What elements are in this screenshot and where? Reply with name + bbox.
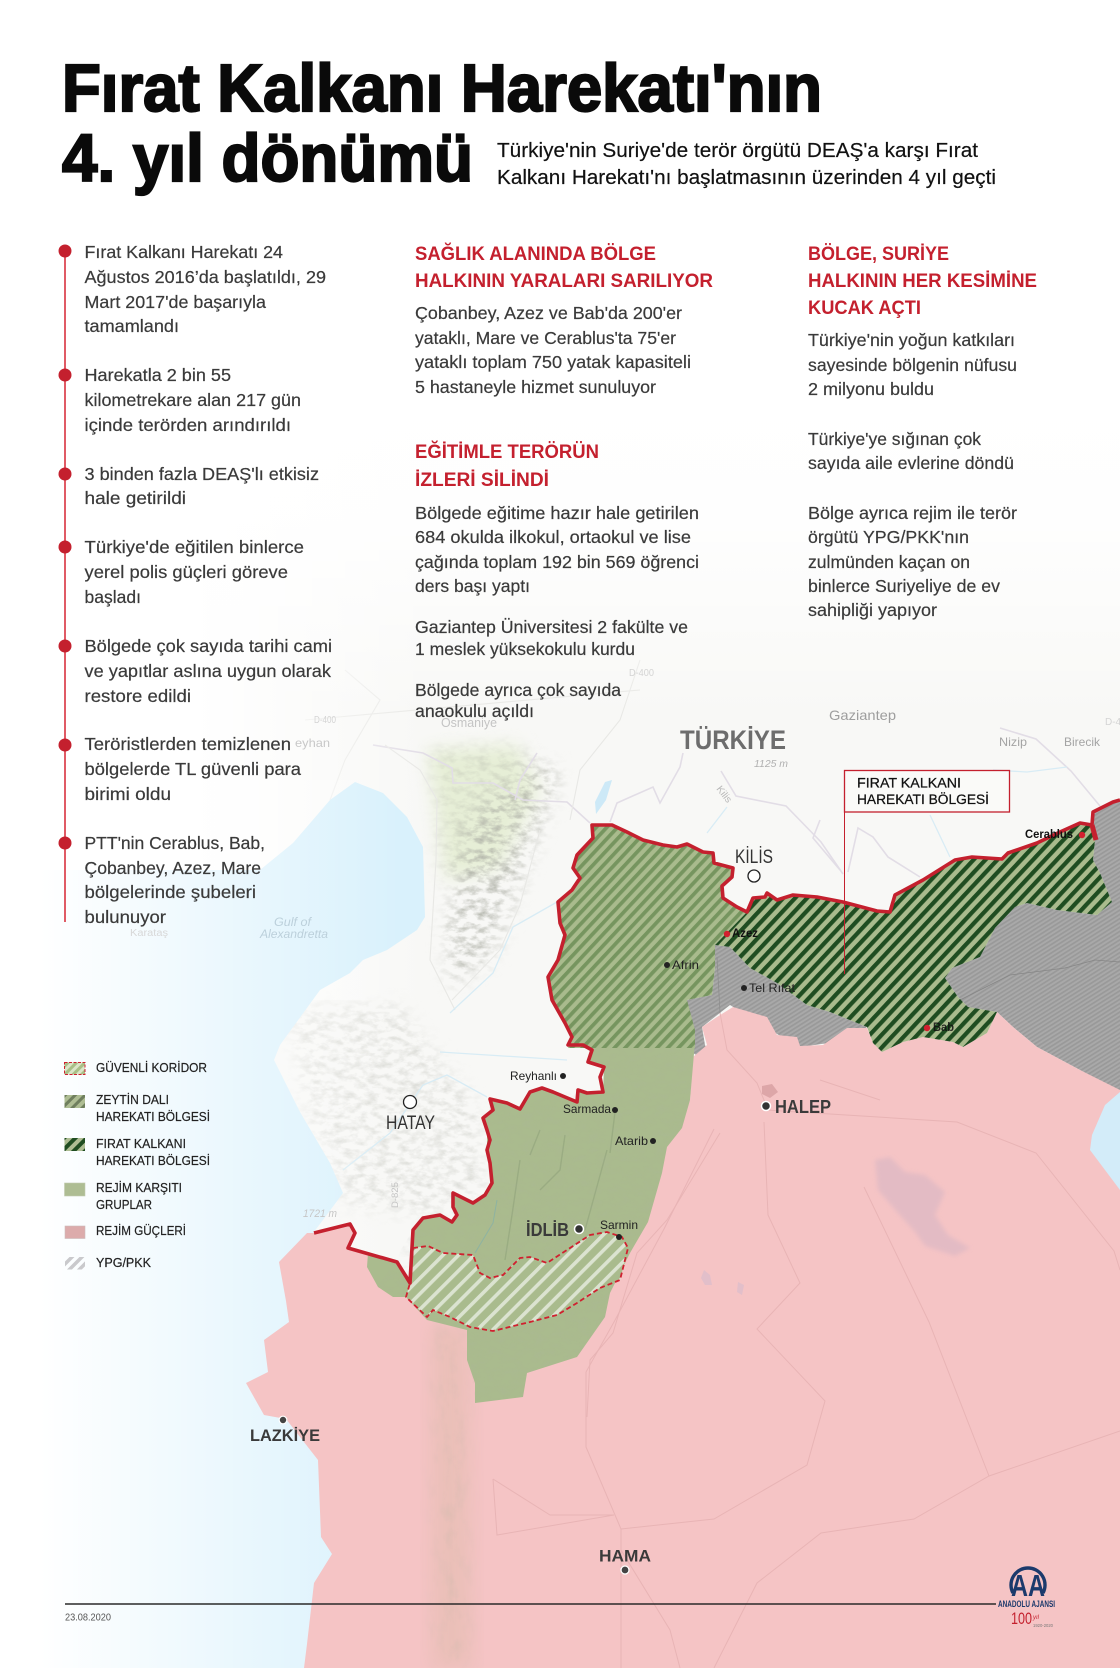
label: Sarmin [600,1218,638,1240]
faint base map labels: Osmaniye [441,715,497,730]
small salt lakes [701,1270,744,1295]
label: Atarib: Atarib [615,1134,648,1148]
border notch at Cerablus [1092,825,1096,840]
text: university: Gaziantep Üniversitesi 2 fakülte ve [415,617,688,637]
faint base map labels: Karataş [130,928,168,939]
text: population [808,330,1017,399]
Euphrates lake [1090,1092,1120,1190]
white fade upper sea [0,780,400,870]
province borders [373,728,1100,877]
faint base map labels: Kilis [714,784,734,805]
green highlands [427,745,540,880]
list item 4: başladı [84,587,141,607]
label: Hama [599,1546,651,1574]
text: education: Bölgede eğitime hazır hale getirilen [415,503,699,523]
panel: left timeline list [58,242,332,927]
logo name: ANADOLU AJANSI [998,1599,1055,1610]
text: refugees: Bölge ayrıca rejim ile terör [808,503,1017,523]
gulf label: Gulf of [274,917,313,929]
sea: Gulf of Alexandretta and Mediterranean [0,782,425,1668]
heading: education: İZLERİ SİLİNDİ [415,468,549,491]
lake [595,780,612,814]
label: Tel Rıfat: Tel Rıfat [749,981,796,995]
list item 5: ve yapıtlar aslına uygun olarak [84,661,331,681]
panel: right column [808,242,1037,620]
text: health: yataklı, Mare ve Cerablus'ta 75'er [415,328,676,348]
faint base map labels [130,668,1120,1220]
Idlib river [475,1200,497,1253]
callout leader line [844,770,846,974]
list item 1: Mart 2017'de başarıyla [84,292,266,312]
faint base map labels: Nizip [999,735,1027,749]
roads [305,660,640,1010]
white fade left [0,870,400,1668]
list item 5 [58,636,332,706]
label: Bab: Bab [933,1020,954,1034]
logo anniversary: 100 [1011,1609,1032,1628]
list item 3: hale getirildi [84,488,186,508]
faint base map labels: eyhan [295,736,330,750]
list item 2: içinde terörden arındırıldı [84,415,291,435]
faint base map labels: D-400 [314,715,336,726]
text: returning families: sayıda aile evlerine döndü [808,453,1014,473]
text: refugees: binlerce Suriyeliye de ev [808,576,1000,596]
legend: Fırat Kalkanı: FIRAT KALKANI [96,1136,186,1151]
label: Reyhanlı: Reyhanlı [510,1069,557,1083]
logo letters: AA [1011,1568,1045,1603]
heading: people [808,242,1037,319]
text: health [415,303,691,397]
heading: health [415,242,713,292]
heading: people: KUCAK AÇTI [808,297,921,319]
callout: Fırat Kalkanı Harekatı Bölgesi [844,770,1010,974]
text: education [415,503,699,596]
list item 4: Türkiye'de eğitilen binlerce [84,537,304,557]
list item 6 [58,734,301,804]
label: İdlib: İDLİB [526,1220,569,1240]
faint base map labels: Gaziantep [829,707,896,723]
logo: Anadolu Ajansı: 1920-2020 [1033,1623,1053,1628]
list item 4 [58,537,304,607]
legend: safe corridor: GÜVENLİ KORİDOR [96,1060,207,1075]
date: 23.08.2020 [65,1612,111,1624]
north-west land fade [0,380,430,1000]
YPG/PKK west area [685,945,867,1065]
heading: education [415,440,599,491]
faint base map labels: Alexandretta [259,929,328,941]
label: Sarmada: Sarmada [563,1102,611,1116]
label: Lazkiye: LAZKİYE [250,1426,320,1445]
label: Sarmin: Sarmin [600,1218,638,1232]
text: returning families [808,429,1014,473]
Hatay terrain texture [292,1004,487,1214]
rivers [343,767,1067,1170]
map labels: cities [250,725,1085,1574]
panel: base map [116,660,1120,1668]
valley terrain [430,1326,473,1666]
list item 7: Çobanbey, Azez, Mare [84,858,261,878]
text: kindergarten: anaokulu açıldı [415,701,534,721]
panel: regime forces area [246,1007,1120,1668]
list item 1: tamamlandı [84,316,179,336]
legend: Zeytin Dalı [64,1092,210,1124]
callout: Fırat Kalkanı Harekatı Bölgesi: HAREKATI BÖLGESİ [857,792,989,807]
regime area fill [246,1007,1120,1668]
label: Kilis: KİLİS [735,847,773,868]
text: education: çağında toplam 192 bin 569 öğrenci [415,552,699,572]
list item 1 [58,242,326,336]
mountain terrain texture [440,758,566,988]
list item 2: kilometrekare alan 217 gün [84,390,301,410]
logo arc [1011,1568,1045,1593]
text: health: Çobanbey, Azez ve Bab'da 200'er [415,303,682,323]
list item 6: bölgelerde TL güvenli para [84,759,301,779]
legend: Fırat Kalkanı: HAREKATI BÖLGESİ [96,1153,210,1168]
regime area roads [493,1013,1120,1668]
heading: people: BÖLGE, SURİYE [808,242,949,265]
list item 6: Teröristlerden temizlenen [84,734,291,754]
highland terrain texture [437,748,520,871]
logo: Anadolu Ajansı: yıl [1032,1615,1040,1621]
list item 7 [58,833,265,927]
title: Fırat Kalkanı Harekatı'nın [62,51,822,126]
text: university [415,617,688,659]
legend: YPG/PKK [65,1255,151,1270]
text: education: ders başı yaptı [415,576,530,596]
label: Kilis [735,847,773,882]
subtitle: Kalkanı Harekatı'nı başlatmasının üzerinden 4 yıl geçti [497,166,996,189]
list item 2 [58,365,301,435]
panel: legend [64,1060,210,1270]
Idlib terrain lines [505,1112,615,1260]
text: refugees: zulmünden kaçan on [808,552,970,572]
faint base map labels: 1125 m [754,758,788,770]
lake Jabbul [875,1157,970,1256]
subtitle [497,139,996,189]
legend: regime [65,1223,186,1238]
callout text: FIRAT KALKANI [857,776,961,790]
logo: Anadolu Ajansı [998,1568,1055,1628]
panel: middle column [415,242,713,721]
list item 5: Bölgede çok sayıda tarihi cami [84,636,332,656]
panel: opposition groups area [360,1040,700,1410]
list item 1: Fırat Kalkanı Harekatı 24 [84,242,283,262]
legend: opposition: GRUPLAR [96,1197,152,1212]
title [62,51,822,196]
list item 7: PTT'nin Cerablus, Bab, [84,833,265,853]
land area [0,380,1120,1668]
label: Lazkiye [250,1416,320,1445]
legend: regime: REJİM GÜÇLERİ [96,1223,186,1238]
heading: education: EĞİTİMLE TERÖRÜN [415,440,599,463]
panel: safe corridor [406,1232,628,1331]
subtitle: Türkiye'nin Suriye'de terör örgütü DEAŞ'a karşı Fırat [497,139,978,162]
legend: YPG/PKK: YPG/PKK [96,1255,151,1270]
text: returning families: Türkiye'ye sığınan çok [808,429,981,449]
list item 1: Ağustos 2016’da başlatıldı, 29 [84,267,326,287]
text: health: yataklı toplam 750 yatak kapasiteli [415,352,691,372]
faint base map labels: 1721 m [303,1208,337,1220]
list item 2: Harekatla 2 bin 55 [84,365,231,385]
label: Hatay: HATAY [386,1113,435,1134]
panel: Zeytin Dalı operation zone [548,825,747,1048]
text: kindergarten: Bölgede ayrıca çok sayıda [415,680,621,700]
label: Halep: HALEP [775,1097,831,1117]
callout box [844,770,1010,812]
list item 3: 3 binden fazla DEAŞ'lı etkisiz [84,464,319,484]
heading: health: HALKININ YARALARI SARILIYOR [415,270,713,292]
list item 7: bulunuyor [84,907,166,927]
legend: opposition [64,1180,182,1212]
faint base map labels: Birecik [1064,735,1101,749]
label: Afrin: Afrin [672,958,699,972]
label: Hama: HAMA [599,1546,651,1566]
text: population: 2 milyonu buldu [808,379,934,399]
list item 3 [58,464,319,508]
text: population: Türkiye'nin yoğun katkıları [808,330,1015,350]
list item 7: bölgelerinde şubeleri [84,882,256,902]
timeline line [64,251,66,922]
legend: opposition: REJİM KARŞITI [96,1180,182,1195]
white fade top [0,380,1120,720]
list item 4: yerel polis güçleri göreve [84,562,288,582]
text: refugees: sahipliği yapıyor [808,600,937,620]
Halep urban patch [762,1084,778,1098]
Idlib green fill [367,1042,695,1403]
legend: Zeytin Dalı: ZEYTİN DALI [96,1092,169,1107]
label: Cerablus: Cerablus [1025,827,1073,841]
legend: Fırat Kalkanı [64,1136,210,1168]
grey roads [960,960,1120,1000]
text: health: 5 hastaneyle hizmet sunuluyor [415,377,656,397]
label: Hatay [386,1096,435,1134]
heading: health: SAĞLIK ALANINDA BÖLGE [415,242,656,265]
list item 6: birimi oldu [84,784,171,804]
panel: YPG/PKK areas [685,800,1120,1092]
legend: Zeytin Dalı: HAREKATI BÖLGESİ [96,1109,210,1124]
label: Türkiye: TÜRKİYE [680,725,786,755]
footer line [65,1603,996,1605]
label: Azez: Azez [732,926,758,940]
YPG/PKK east area [945,800,1120,1092]
text: refugees: örgütü YPG/PKK'nın [808,527,969,547]
heading: people: HALKININ HER KESİMİNE [808,269,1037,292]
panel: Fırat Kalkanı operation zone [715,823,1112,1052]
text: population: sayesinde bölgenin nüfusu [808,355,1017,375]
faint base map labels: D-825 [390,1182,401,1208]
title: 4. yıl dönümü [62,121,473,196]
text: education: 684 okulda ilkokul, ortaokul ve lise [415,527,691,547]
text: refugees [808,503,1017,620]
text: kindergarten [415,680,621,721]
text: university: 1 meslek yüksekokulu kurdu [415,639,635,659]
list item 5: restore edildi [84,686,191,706]
faint base map labels: D-400 [629,668,654,679]
label: Bab [924,1020,954,1034]
turkish-syrian border line [314,800,1120,1283]
